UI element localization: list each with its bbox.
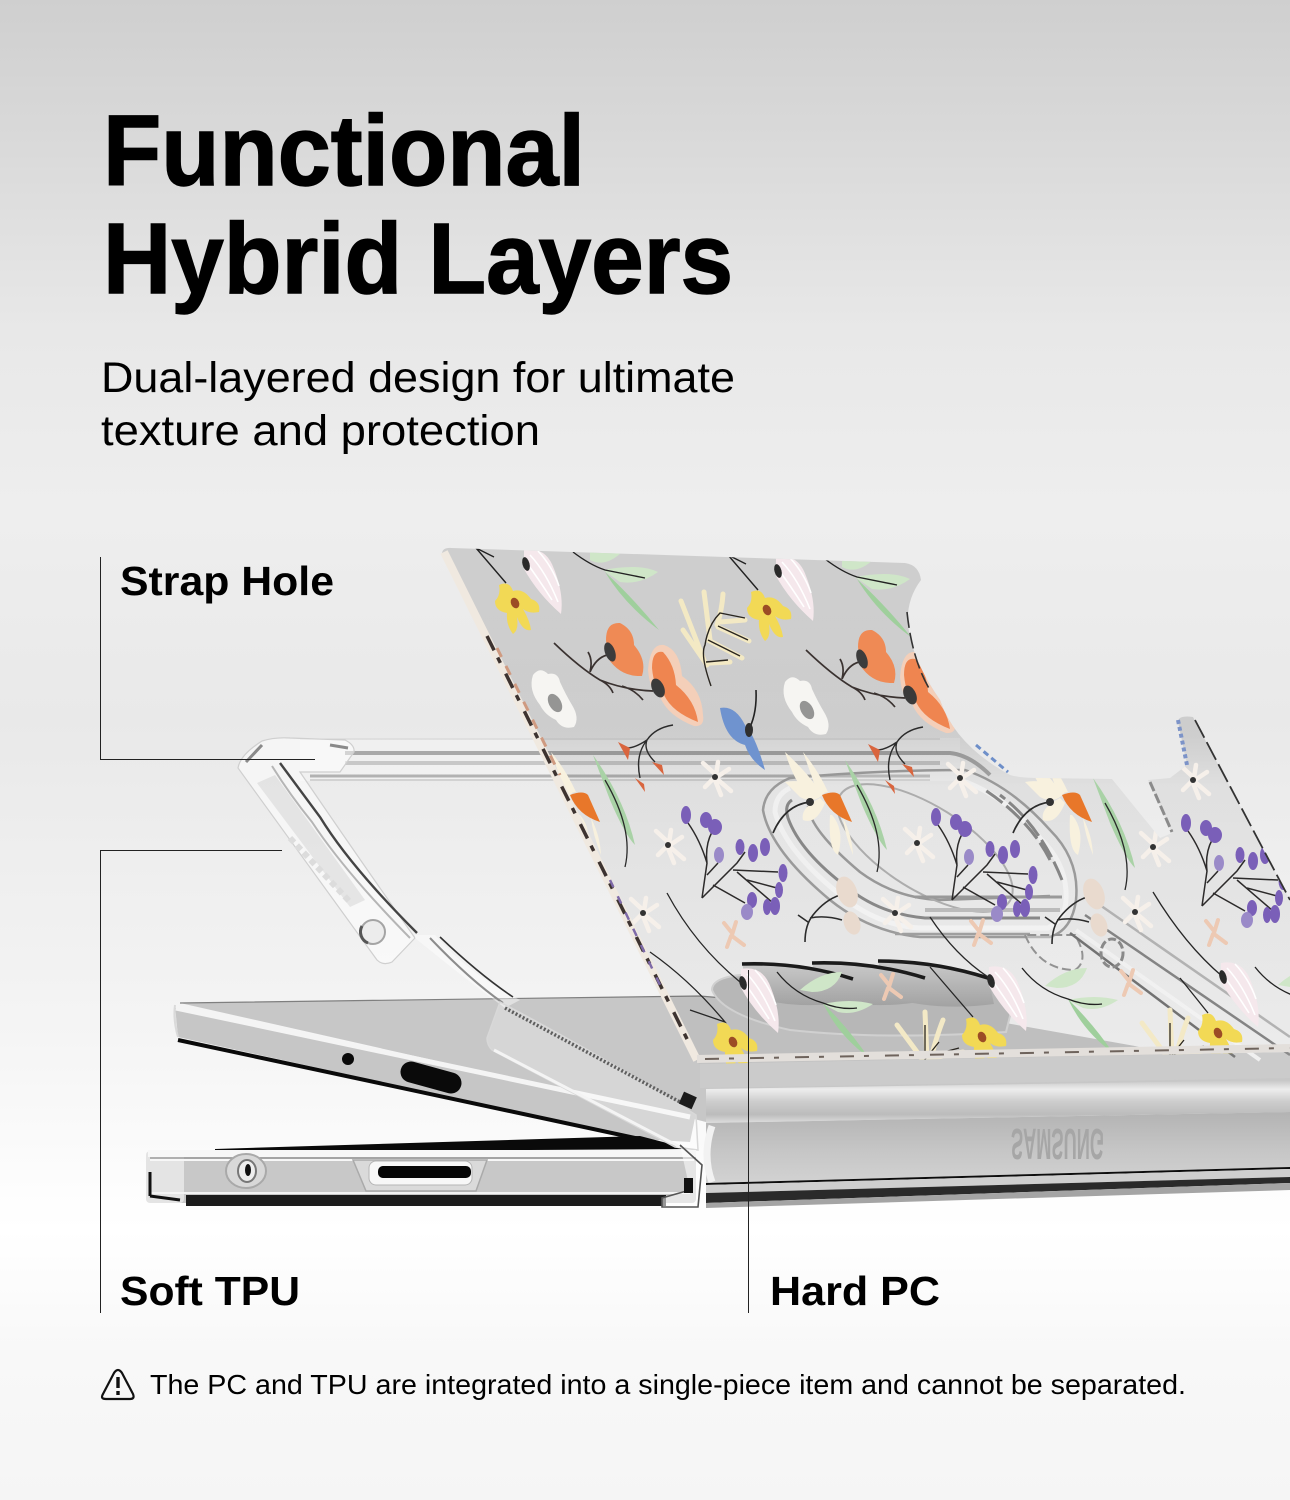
subtitle: Dual-layered design for ultimate xyxy=(101,354,735,402)
icon: microphone hole xyxy=(342,1053,354,1065)
phone back plane xyxy=(180,996,1290,1122)
top-left corner and side tab xyxy=(238,738,415,964)
footnote: The PC and TPU are integrated into a single-piece item and cannot be separated. xyxy=(150,1369,1186,1400)
hard PC panel with floral print xyxy=(442,548,1290,1073)
engraved brand mark xyxy=(290,838,350,902)
folded TPU case edge xyxy=(238,738,698,1150)
title: Functional xyxy=(103,95,585,207)
closed phone bottom edge in clear TPU xyxy=(146,1145,702,1207)
speaker slot xyxy=(353,1160,487,1191)
main phone body with hinge: SAMSUNG xyxy=(1011,1119,1104,1168)
strap hole xyxy=(361,920,385,944)
main phone body with hinge xyxy=(706,1080,1290,1208)
icon: warning triangle xyxy=(102,1370,134,1399)
clear hinge flap xyxy=(487,1002,698,1150)
camera island xyxy=(712,960,1012,1036)
clear TPU camera ring xyxy=(763,759,1290,1060)
icon: USB-C port xyxy=(411,1072,451,1083)
label: soft TPU: Soft TPU xyxy=(120,1268,300,1314)
open phone side with USB port xyxy=(174,1005,695,1142)
PC panel edges xyxy=(444,552,1290,1060)
subtitle xyxy=(101,354,735,455)
lower frame rail xyxy=(415,935,520,1008)
title: Hybrid Layers xyxy=(103,203,733,315)
label: hard PC: Hard PC xyxy=(770,1268,940,1314)
floral print xyxy=(476,548,1290,1073)
leader line: strap hole xyxy=(100,557,315,760)
TPU frame top bar xyxy=(300,738,990,781)
panel: clear PC sheet xyxy=(442,548,1290,1064)
title xyxy=(103,95,733,315)
icon: microphone ring xyxy=(226,1154,266,1188)
leader line: hard PC xyxy=(748,970,750,1313)
subtitle: texture and protection xyxy=(101,407,540,455)
label: strap hole: Strap Hole xyxy=(120,558,334,604)
leader line: soft TPU xyxy=(100,850,282,1313)
hinge corner xyxy=(662,1145,702,1207)
black gap wedge xyxy=(215,1136,690,1152)
